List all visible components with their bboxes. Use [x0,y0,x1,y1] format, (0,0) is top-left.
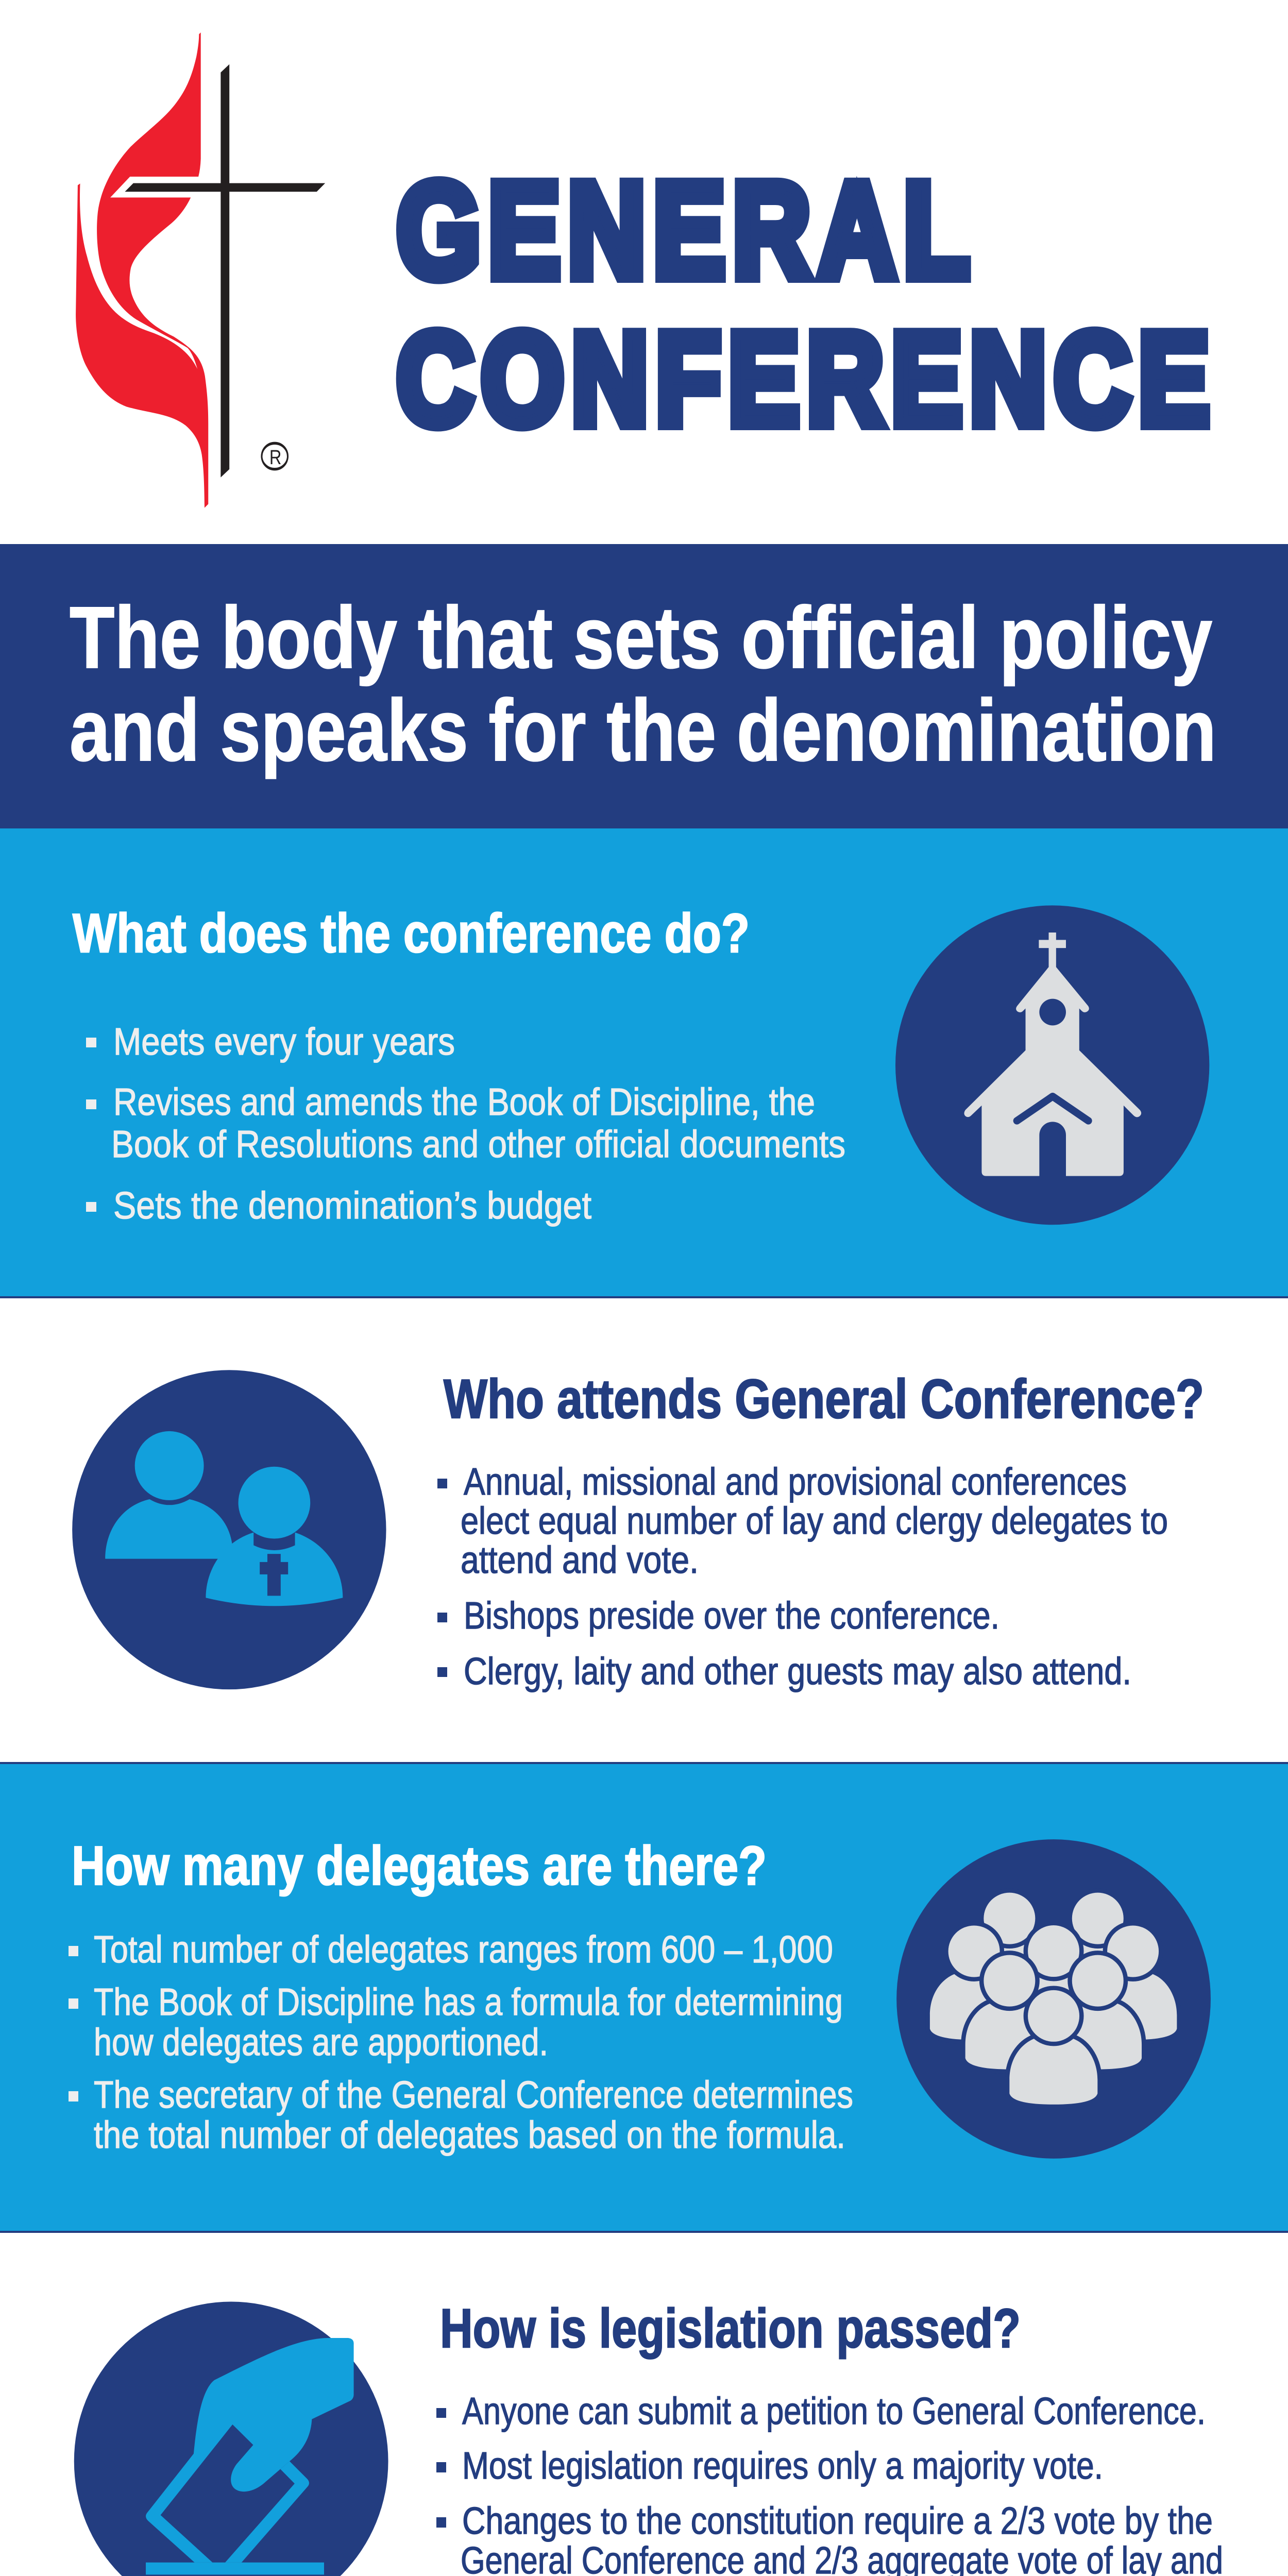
bullet list [86,1020,845,1227]
bullet list: The Book of Discipline has a formula for determining [94,1980,843,2023]
bullet list [437,1460,1168,1692]
bullet list: Bishops preside over the conference. [464,1594,999,1637]
bullet list: Book of Resolutions and other official documents [111,1123,845,1165]
bullet list: how delegates are apportioned. [94,2021,548,2063]
icon: group of people [896,1839,1211,2159]
icon: church [895,905,1209,1225]
icon: hand casting ballot [74,2301,388,2576]
bullet list: Revises and amends the Book of Discipline, the [113,1080,815,1123]
bullet list: Sets the denomination’s budget [113,1184,591,1227]
panel: tagline band [0,544,1288,828]
panel: what does the conference do [0,828,1288,1298]
title: GENERAL [397,155,977,306]
bullet list: attend and vote. [461,1538,699,1581]
panel: who attends general conference [72,1368,1204,1692]
bullet list: elect equal number of lay and clergy delegates to [461,1499,1168,1542]
logo: cross and flame [76,32,325,508]
panel: how is legislation passed [74,2297,1223,2576]
title [397,155,1217,452]
bullet list: Total number of delegates ranges from 600 – 1,000 [94,1928,833,1971]
panel: how many delegates are there [0,1762,1288,2233]
heading: How many delegates are there? [72,1835,767,1896]
icon: lay person and clergy [72,1370,386,1689]
heading: How is legislation passed? [440,2297,1021,2359]
bullet list: The secretary of the General Conference determines [94,2073,853,2116]
bullet list: the total number of delegates based on the formula. [94,2113,845,2156]
heading: What does the conference do? [73,902,750,964]
header [76,32,1217,508]
bullet list [69,1928,853,2156]
bullet list: Most legislation requires only a majority vote. [462,2444,1103,2487]
bullet list: Clergy, laity and other guests may also attend. [464,1650,1131,1692]
bullet list: Meets every four years [113,1020,455,1063]
bullet list [436,2389,1223,2576]
bullet list: Annual, missional and provisional conferences [464,1460,1127,1503]
logo: cross and flame: R [269,446,281,468]
